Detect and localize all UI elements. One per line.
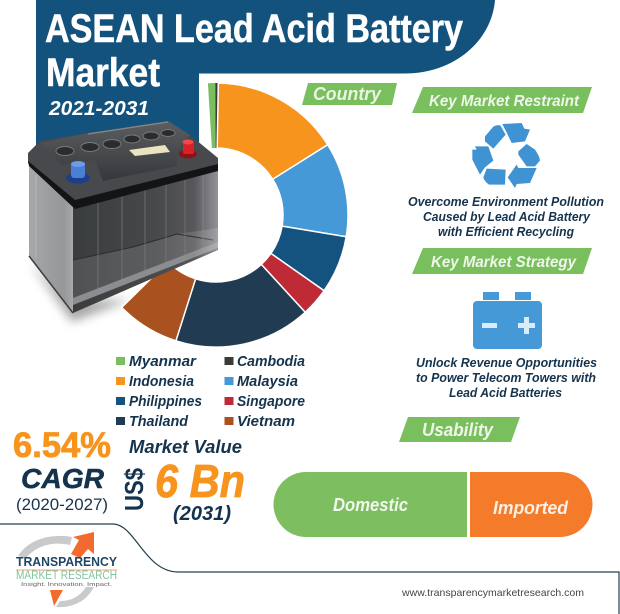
tag: Key Market Restraint: Key Market Restraint (429, 93, 580, 110)
text: strategy description: Unlock Revenue Opportunities (416, 355, 597, 370)
tag: Country: Country (313, 84, 382, 104)
logo: Transparency Market Research: Insight. Innovation. Impact. (21, 582, 112, 588)
usability split bar (274, 472, 592, 537)
tag: Usability: Usability (422, 420, 494, 440)
slice: Indonesia (217, 83, 328, 179)
legend item: Indonesia: Indonesia (129, 373, 194, 390)
text: strategy description: to Power Telecom Towers with (416, 370, 596, 385)
text: restraint description (408, 194, 604, 239)
slice: Thailand (176, 264, 305, 347)
segment: Domestic: Domestic (333, 495, 408, 515)
website url: www.transparencymarketresearch.com (401, 587, 584, 599)
stat: market value: 6 Bn (155, 455, 245, 507)
battery lid (28, 121, 218, 205)
legend item: Vietnam: Vietnam (237, 413, 295, 430)
battery shadow (30, 262, 130, 322)
slice: Malaysia (273, 145, 348, 237)
legend item: Singapore: Singapore (237, 393, 305, 410)
slice: Myanmar (208, 83, 216, 148)
terminal: negative blue (66, 161, 90, 184)
battery side panel (29, 160, 73, 313)
subtitle: years: 2021-2031 (48, 98, 149, 120)
stat: CAGR: CAGR (21, 463, 105, 494)
text: restraint description: Overcome Environment Pollution (408, 194, 604, 209)
battery vent caps (56, 130, 175, 156)
stat: market value: US$ (119, 468, 149, 511)
title: Market (46, 51, 160, 95)
segment: Imported (470, 472, 592, 537)
battery label (129, 145, 170, 156)
stat: CAGR: (2020-2027) (16, 495, 108, 514)
text: restraint description: Caused by Lead Acid Battery (423, 209, 591, 224)
logo arrow (71, 532, 94, 558)
legend item: Thailand: Thailand (129, 413, 189, 430)
icon: car battery (28, 121, 218, 313)
tag: Key Market Strategy (412, 248, 592, 274)
slice: Philippines (271, 226, 346, 291)
logo lower arrow (50, 590, 63, 606)
text: strategy description: Lead Acid Batteries (449, 385, 562, 400)
donut chart: country share (122, 83, 348, 347)
logo: Transparency Market Research (16, 532, 117, 607)
footer divider line (0, 524, 619, 614)
tag: Usability (399, 417, 520, 442)
terminal: positive red (179, 140, 197, 158)
slice: Cambodia (215, 83, 218, 148)
legend item: Malaysia: Malaysia (237, 373, 298, 390)
slice: Vietnam (122, 262, 196, 341)
tag: Country (302, 83, 397, 105)
stat: market value: Market Value (129, 437, 242, 457)
legend item: Cambodia: Cambodia (237, 353, 305, 370)
text: strategy description (416, 355, 597, 400)
title (45, 7, 464, 95)
stat: market value (119, 437, 245, 525)
legend item: Philippines: Philippines (129, 393, 202, 410)
legend (116, 353, 305, 430)
icon: recycling arrows (472, 123, 540, 188)
logo lower arc (56, 587, 94, 607)
stat: market value: (2031) (173, 503, 231, 525)
icon: battery (473, 292, 542, 349)
battery front panel (73, 165, 218, 313)
stat: CAGR: 6.54% (13, 426, 111, 465)
logo upper arc (18, 536, 72, 558)
text: restraint description: with Efficient Recycling (438, 224, 574, 239)
tag: Key Market Strategy: Key Market Strategy (431, 254, 577, 271)
legend item: Myanmar: Myanmar (129, 353, 197, 370)
logo: Transparency Market Research: MARKET RESEARCH (16, 570, 117, 582)
stat: CAGR (13, 426, 111, 514)
segment: Domestic (274, 472, 467, 537)
slice: Singapore (261, 253, 324, 312)
title banner background (36, 0, 495, 160)
tag: Key Market Restraint (412, 87, 592, 113)
title: ASEAN Lead Acid Battery (45, 7, 464, 51)
logo wordmark: TRANSPARENCY (16, 554, 117, 569)
segment: Imported: Imported (493, 498, 569, 518)
